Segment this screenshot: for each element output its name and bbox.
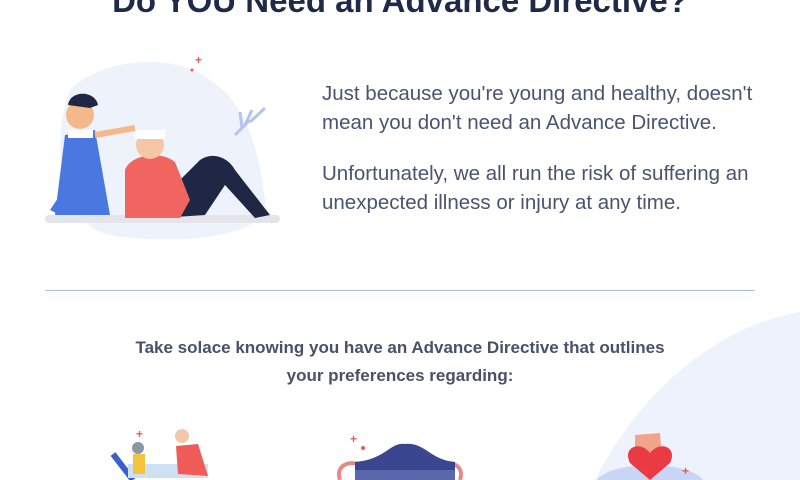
- illustration: first aid: +: [195, 53, 202, 67]
- icon: patient care: [110, 427, 208, 480]
- icon: heart in hand: [597, 433, 703, 480]
- paragraph 1: [322, 82, 752, 134]
- subheading: [135, 338, 665, 385]
- icon: patient care: +: [136, 427, 143, 441]
- paragraph 2: [322, 162, 749, 214]
- paragraph 1: Just because you're young and healthy, doesn't: [322, 82, 752, 105]
- subheading: your preferences regarding:: [287, 366, 513, 385]
- subheading: Take solace knowing you have an Advance Directive that outlines: [135, 338, 665, 357]
- illustration: first aid: [45, 53, 280, 240]
- icon: heart in hand: +: [682, 464, 689, 478]
- icon: face mask: +: [350, 432, 357, 446]
- intro text: [322, 82, 752, 214]
- paragraph 1: mean you don't need an Advance Directive.: [322, 111, 717, 134]
- icon: face mask: [337, 432, 463, 480]
- paragraph 2: Unfortunately, we all run the risk of suffering an: [322, 162, 749, 185]
- paragraph 2: unexpected illness or injury at any time.: [322, 191, 681, 214]
